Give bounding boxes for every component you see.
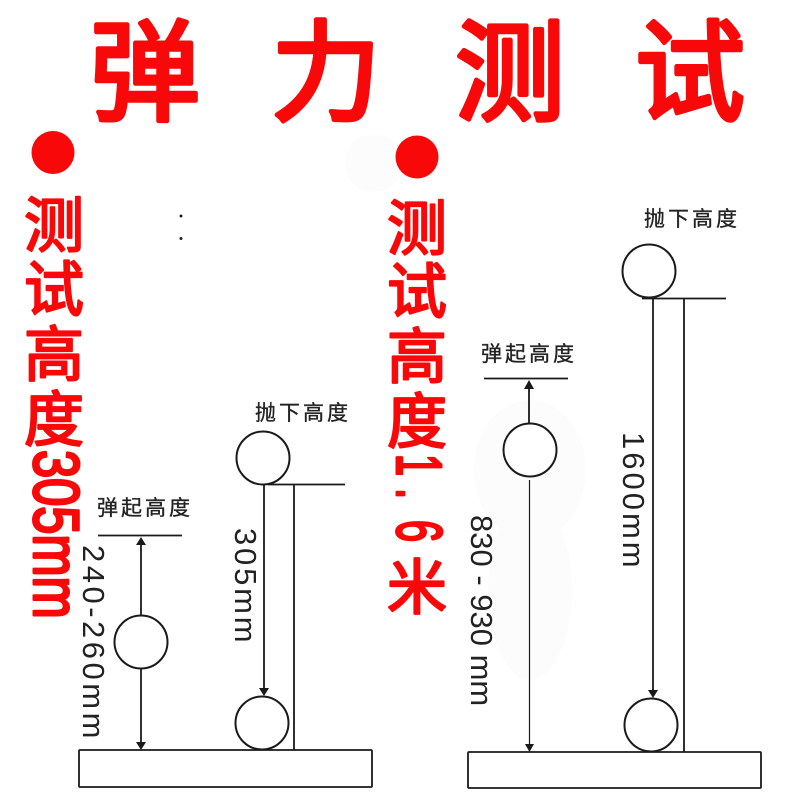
left diagram (76, 402, 372, 787)
rebound line (484, 378, 568, 380)
label: bounce height: 弹起高度 (481, 343, 577, 366)
bullet: right red dot (396, 136, 438, 178)
bullet: left red dot (32, 131, 74, 174)
rebound line (98, 534, 182, 536)
left heading: test height 305mm (20, 193, 91, 619)
right heading: test height 1.6m: 6 (383, 520, 453, 542)
right heading: test height 1.6m (383, 196, 453, 622)
label: drop height: 抛下高度 (644, 208, 740, 231)
drop arrow (648, 298, 658, 698)
right heading: test height 1.6m: . (383, 488, 453, 499)
right heading: test height 1.6m: 试 (387, 259, 447, 326)
right heading: test height 1.6m: 米 (387, 555, 447, 622)
faint watermark (346, 135, 586, 680)
left heading: test height 305mm: 测 (24, 193, 84, 260)
right heading: test height 1.6m: 高 (387, 324, 447, 391)
stand post and drop line (268, 484, 345, 750)
title: 试 (635, 13, 745, 136)
ball: landing (624, 698, 678, 752)
left heading: test height 305mm: 305mm (20, 450, 91, 619)
label: bounce height: 弹起高度 (97, 497, 193, 520)
bounce arrows (524, 380, 534, 752)
left heading: test height 305mm: 试 (24, 257, 84, 324)
value: 305mm: 305mm (228, 528, 263, 645)
drop arrow (259, 485, 269, 696)
platform (468, 752, 761, 788)
value: 830-930 mm: 830 - 930 mm (464, 515, 499, 706)
title: 测 (455, 13, 565, 136)
stand post and drop line (642, 298, 726, 752)
label: drop height: 抛下高度 (255, 402, 351, 425)
value: 1600mm: 1600mm (616, 432, 651, 571)
ball: bounce (114, 616, 168, 668)
right heading: test height 1.6m: 测 (387, 196, 447, 263)
left heading: test height 305mm: 高 (24, 322, 84, 389)
value: 240-260mm: 240-260mm (76, 545, 111, 742)
left heading: test height 305mm: 度 (24, 387, 84, 454)
small dots (180, 214, 182, 240)
ball: drop start (622, 244, 676, 298)
right heading: test height 1.6m: 1 (383, 454, 453, 476)
ball: bounce (504, 424, 556, 476)
platform (79, 750, 372, 787)
right heading: test height 1.6m: 度 (387, 389, 447, 456)
title: 弹 (90, 13, 200, 136)
ball: drop start (236, 432, 290, 484)
ball: landing (236, 696, 288, 750)
title (90, 13, 745, 136)
bounce arrow (136, 537, 146, 750)
right diagram (464, 208, 761, 788)
title: 力 (271, 13, 381, 136)
